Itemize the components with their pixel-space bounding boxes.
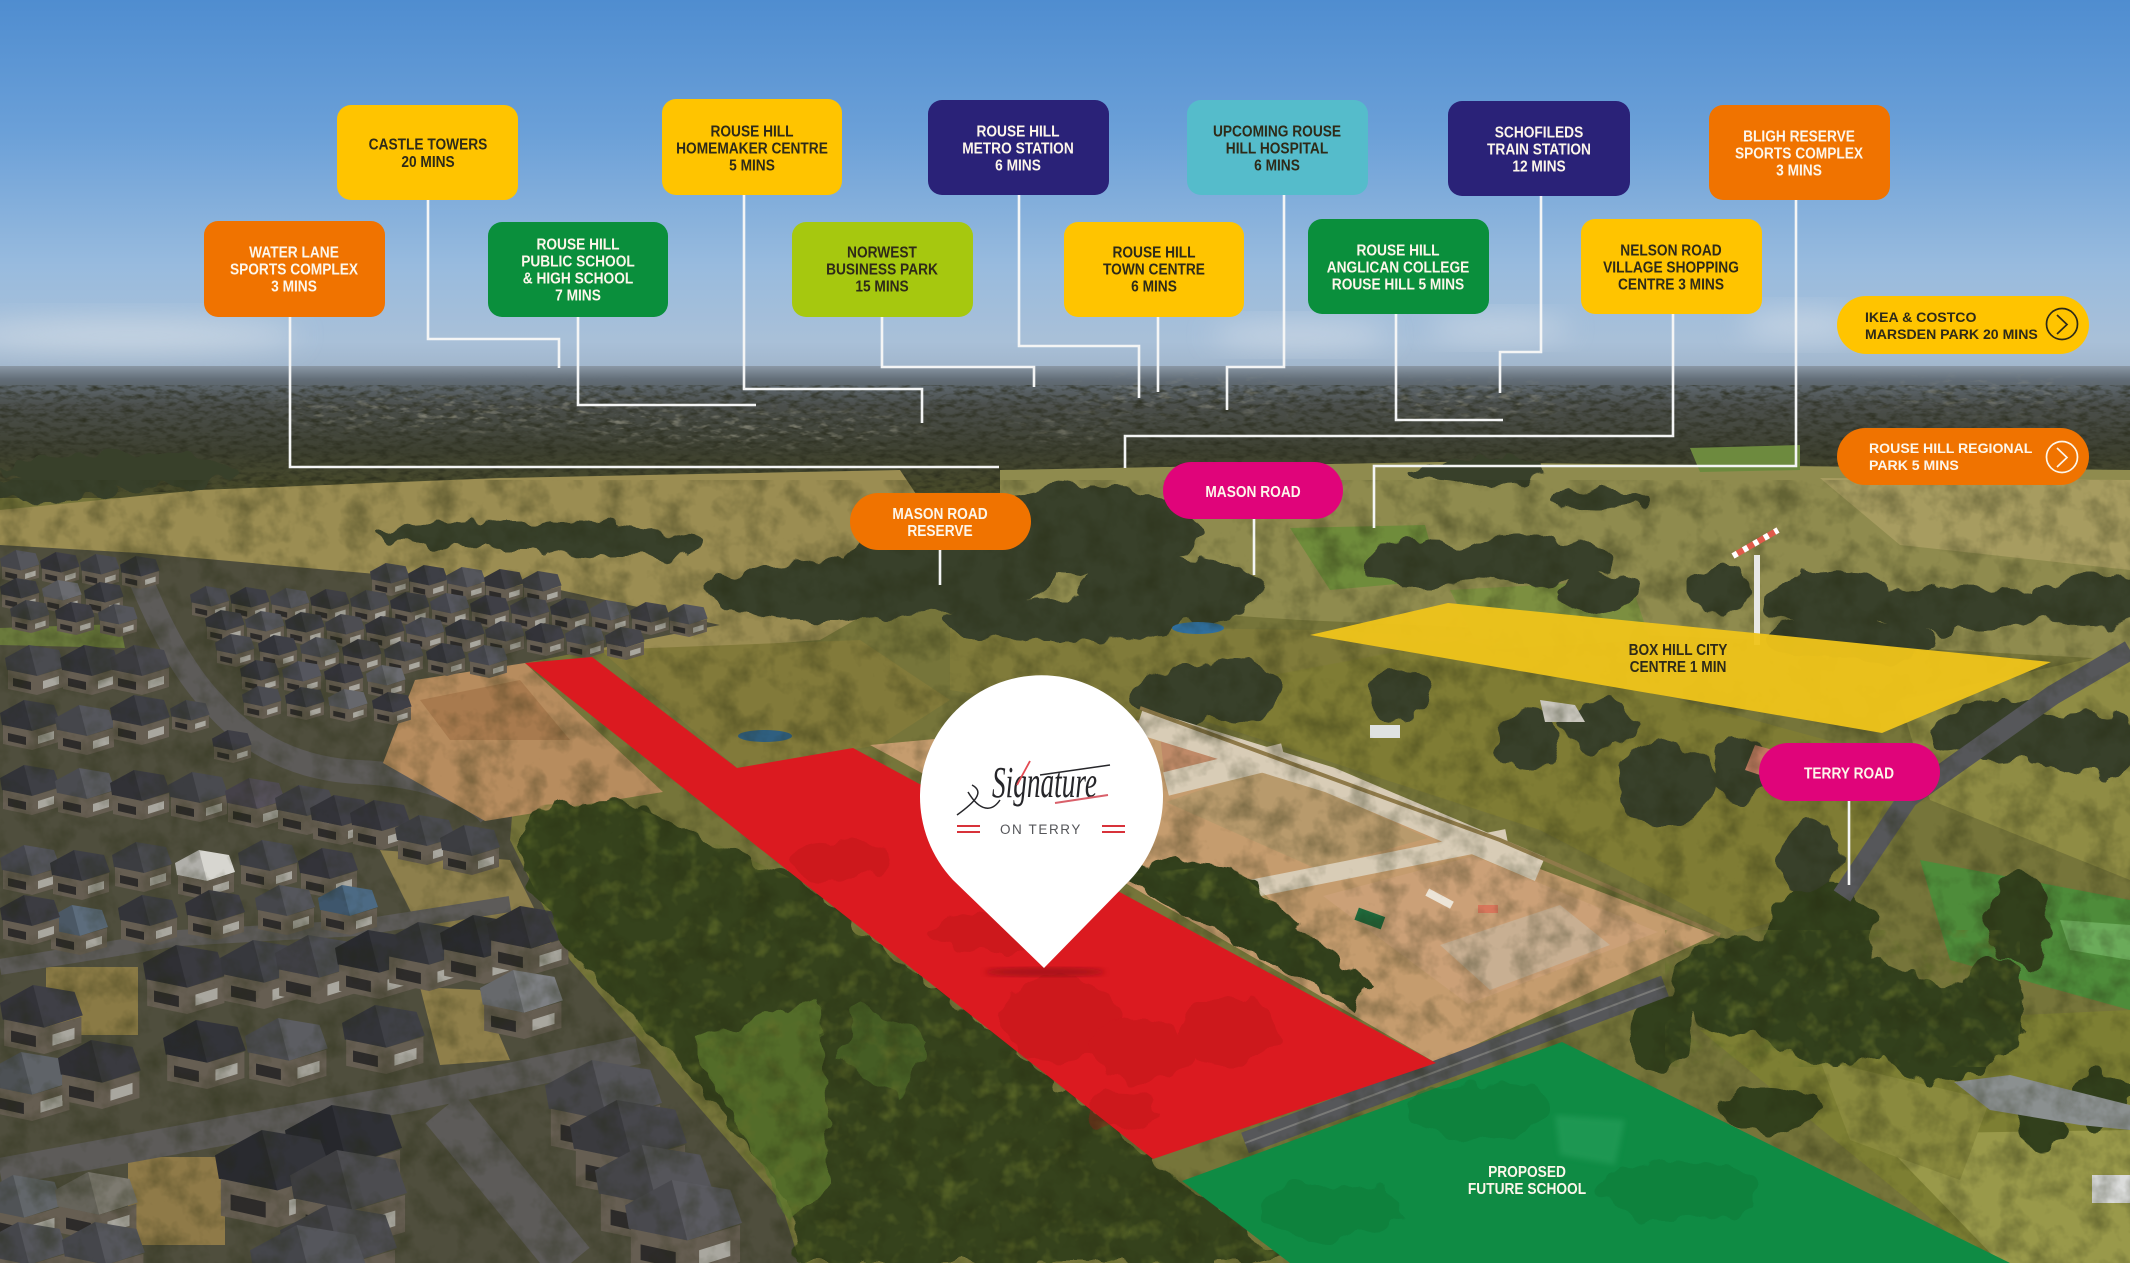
connector: Mason Road Reserve — [939, 550, 941, 585]
label: Schofields Train Station: TRAIN STATION — [1487, 142, 1591, 159]
label: Rouse Hill Anglican College: ROUSE HILL 5 MINS — [1332, 277, 1464, 294]
label: Rouse Hill Anglican College — [1308, 219, 1489, 314]
connector: Bligh Reserve — [1374, 200, 1796, 528]
ponds — [1172, 622, 1224, 634]
pill: IKEA and Costco: MARSDEN PARK 20 MINS — [1865, 326, 2038, 342]
pill: IKEA and Costco: IKEA & COSTCO — [1865, 309, 1976, 325]
label: Nelson Road Village Shopping Centre — [1581, 219, 1762, 314]
label: Water Lane Sports Complex — [204, 221, 385, 317]
label: Water Lane Sports Complex: 3 MINS — [271, 279, 317, 296]
label: Schofields Train Station — [1448, 101, 1630, 196]
label: Norwest Business Park: 15 MINS — [855, 279, 909, 296]
pin shadow — [985, 967, 1105, 977]
label: proposed future school: PROPOSED — [1488, 1164, 1566, 1181]
label: Castle Towers: CASTLE TOWERS — [369, 137, 488, 154]
background: aerial ground — [0, 366, 2130, 1263]
connector: Schofields — [1500, 196, 1541, 393]
connector: Metro Station — [1019, 195, 1139, 398]
label: Rouse Hill Public School: ROUSE HILL — [536, 237, 620, 254]
label: Rouse Hill Metro Station — [928, 100, 1109, 195]
logo: Signature script — [957, 757, 1110, 815]
pill: IKEA and Costco — [1837, 296, 2089, 354]
gravel roads — [1139, 721, 1540, 890]
pill: Terry Road — [1759, 743, 1940, 801]
label: Upcoming Rouse Hill Hospital: 6 MINS — [1254, 158, 1300, 175]
label: Rouse Hill Public School: & HIGH SCHOOL — [523, 271, 633, 288]
icon: chevron circle light — [2046, 442, 2078, 472]
connector: Town Centre — [1157, 317, 1159, 392]
site tree line and right trees — [1126, 860, 2126, 1154]
background: sky — [0, 0, 2130, 380]
big grass field beside the site — [1244, 663, 1878, 932]
map pin with logo — [920, 675, 1163, 968]
mid-distance fields — [0, 470, 960, 655]
pill: Rouse Hill Regional Park: PARK 5 MINS — [1869, 457, 1959, 473]
overlay: red site footprint — [525, 657, 1436, 1159]
label: Rouse Hill Metro Station: 6 MINS — [995, 158, 1041, 175]
pill: Rouse Hill Regional Park — [1837, 428, 2089, 485]
label: Rouse Hill Public School: 7 MINS — [555, 288, 601, 305]
house rows — [0, 550, 742, 1263]
connector: Water Lane — [290, 317, 999, 467]
suburb ground — [0, 545, 800, 1263]
connector: Homemaker Centre — [744, 195, 922, 423]
label: Rouse Hill Homemaker Centre: 5 MINS — [729, 158, 775, 175]
pill: Mason Road Reserve: RESERVE — [907, 523, 973, 540]
label: Box Hill City Centre: CENTRE 1 MIN — [1630, 659, 1726, 676]
connector: Terry Road — [1848, 801, 1850, 885]
connector: Castle Towers — [428, 200, 559, 368]
label: Rouse Hill Metro Station: ROUSE HILL — [976, 124, 1060, 141]
label: Water Lane Sports Complex: SPORTS COMPLEX — [230, 262, 358, 279]
connector: Hospital — [1227, 195, 1284, 410]
label: Schofields Train Station: 12 MINS — [1512, 159, 1566, 176]
Terry Road carriageway — [1245, 650, 2130, 1143]
label: Norwest Business Park — [792, 222, 973, 317]
label: Rouse Hill Homemaker Centre: HOMEMAKER CENTRE — [676, 141, 828, 158]
pill: Mason Road Reserve — [850, 493, 1031, 550]
general texture — [0, 480, 2130, 1263]
label: Nelson Road Village Shopping Centre: CENTRE 3 MINS — [1618, 277, 1724, 294]
crane — [1733, 530, 1778, 645]
label: Water Lane Sports Complex: WATER LANE — [249, 245, 339, 262]
overlay: proposed future school — [1182, 1042, 2010, 1263]
label: Schofields Train Station: SCHOFILEDS — [1495, 125, 1583, 142]
label: Bligh Reserve Sports Complex: SPORTS COMPLEX — [1735, 146, 1863, 163]
label: Bligh Reserve Sports Complex — [1709, 105, 1890, 200]
overlay: Box Hill City Centre — [1310, 603, 2051, 733]
label: Upcoming Rouse Hill Hospital — [1187, 100, 1368, 195]
red-site neighbouring dirt works — [383, 663, 663, 821]
pill: Terry Road: TERRY ROAD — [1804, 766, 1894, 783]
distant tree clumps — [0, 454, 2130, 900]
label: Bligh Reserve Sports Complex: BLIGH RESERVE — [1743, 129, 1855, 146]
logo: red bars — [957, 825, 1125, 833]
label: Rouse Hill Public School — [488, 222, 668, 317]
label: Box Hill City Centre: BOX HILL CITY — [1629, 642, 1728, 659]
pill: Rouse Hill Regional Park: ROUSE HILL REGIONAL — [1869, 440, 2033, 456]
construction site earth — [870, 720, 1715, 1063]
subdivision roads — [0, 573, 638, 1263]
label: Rouse Hill Homemaker Centre — [662, 99, 842, 195]
logo: ON TERRY: ON TERRY — [1000, 822, 1082, 837]
label: Rouse Hill Town Centre: 6 MINS — [1131, 279, 1177, 296]
icon: chevron circle dark — [2046, 308, 2078, 340]
label: Nelson Road Village Shopping Centre: VILLAGE SHOPPING — [1603, 260, 1739, 277]
logo: Signature script: Signature — [992, 757, 1097, 807]
connector: Anglican College — [1396, 314, 1503, 420]
label: proposed future school: FUTURE SCHOOL — [1468, 1181, 1586, 1198]
forest belt — [510, 800, 1290, 1263]
label: Upcoming Rouse Hill Hospital: UPCOMING ROUSE — [1213, 124, 1341, 141]
label: Rouse Hill Public School: PUBLIC SCHOOL — [521, 254, 635, 271]
pill: Mason Road: MASON ROAD — [1205, 484, 1301, 501]
label: Castle Towers: 20 MINS — [401, 154, 455, 171]
label: Nelson Road Village Shopping Centre: NELSON ROAD — [1620, 243, 1722, 260]
label: Rouse Hill Metro Station: METRO STATION — [962, 141, 1074, 158]
label: Rouse Hill Homemaker Centre: ROUSE HILL — [710, 124, 794, 141]
pill: Mason Road Reserve: MASON ROAD — [892, 506, 988, 523]
label: Rouse Hill Anglican College: ANGLICAN COLLEGE — [1327, 260, 1469, 277]
label: Bligh Reserve Sports Complex: 3 MINS — [1776, 163, 1822, 180]
label: Rouse Hill Anglican College: ROUSE HILL — [1356, 243, 1440, 260]
connector: Norwest — [882, 317, 1034, 387]
label: Castle Towers — [337, 105, 518, 200]
label: Rouse Hill Town Centre: TOWN CENTRE — [1103, 262, 1205, 279]
connector: Nelson Road — [1125, 314, 1673, 468]
connector: Rouse Hill Public School — [578, 317, 756, 405]
label: Norwest Business Park: NORWEST — [847, 245, 917, 262]
pill: Mason Road — [1163, 462, 1343, 519]
label: Rouse Hill Town Centre — [1064, 222, 1244, 317]
label: Upcoming Rouse Hill Hospital: HILL HOSPITAL — [1226, 141, 1328, 158]
label: Rouse Hill Town Centre: ROUSE HILL — [1112, 245, 1196, 262]
label: Norwest Business Park: BUSINESS PARK — [826, 262, 938, 279]
connector: Mason Road — [1253, 519, 1255, 575]
